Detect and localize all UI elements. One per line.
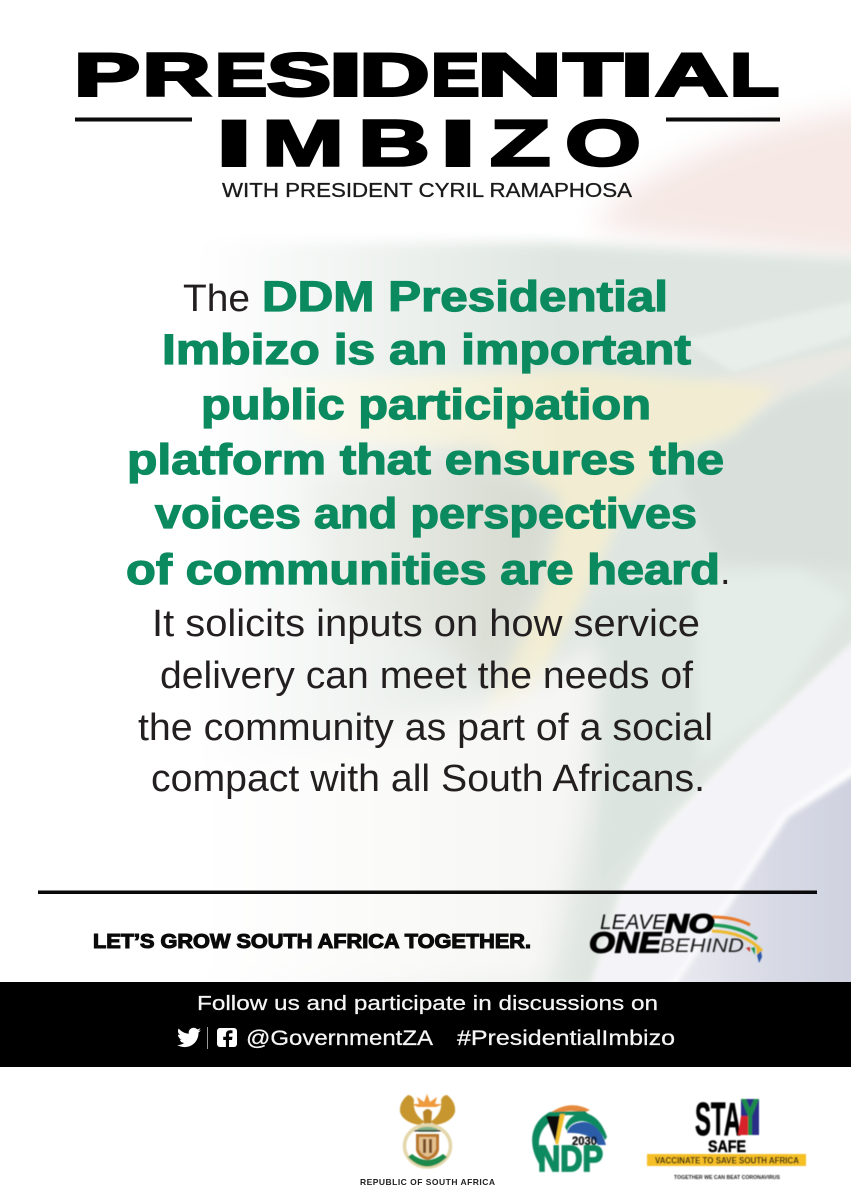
word STA: STA <box>695 1093 741 1145</box>
heading: PRESIDENTIAL: I <box>328 42 362 108</box>
banner text: VACCINATE TO SAVE SOUTH AFRICA <box>655 1156 799 1166</box>
heading: PRESIDENTIAL: P <box>74 42 140 108</box>
heading rule right <box>666 118 780 122</box>
background: faded South African flag <box>270 104 851 982</box>
green highlighted statement: of communities are heard <box>126 546 720 594</box>
icon: twitter <box>177 1028 201 1047</box>
icon divider <box>207 1027 208 1049</box>
green highlighted statement: Imbizo is an important <box>162 326 691 374</box>
logo: Leave No One Behind: ONE <box>589 928 663 960</box>
slogan: LET’S GROW SOUTH AFRICA TOGETHER. <box>93 931 531 953</box>
heading: PRESIDENTIAL: R <box>142 42 210 108</box>
green highlighted statement: . <box>720 551 731 593</box>
main message text <box>126 273 731 800</box>
supporting statement: the community as part of a social <box>138 707 713 749</box>
logo: Leave No One Behind <box>589 908 762 963</box>
green band <box>565 1113 607 1140</box>
twitter and facebook handle: @GovernmentZA <box>246 1027 433 1050</box>
supporting statement <box>138 603 713 800</box>
flag colour ticks <box>746 947 750 952</box>
heading: PRESIDENTIAL: E <box>215 42 267 108</box>
logo: Leave No One Behind: NO <box>665 908 714 938</box>
rainbow swoosh <box>712 917 762 951</box>
heading: PRESIDENTIAL: S <box>267 42 331 108</box>
blue band <box>567 1122 606 1145</box>
heading: IMBIZO <box>216 107 641 180</box>
subtitle: WITH PRESIDENT CYRIL RAMAPHOSA <box>222 180 633 202</box>
supporting statement: delivery can meet the needs of <box>160 655 693 697</box>
heading: PRESIDENTIAL: A <box>656 42 728 108</box>
green highlighted statement: platform that ensures the <box>127 436 724 484</box>
green highlighted statement: voices and perspectives <box>155 490 697 538</box>
heading rule left <box>75 118 192 122</box>
shield <box>416 1134 439 1160</box>
title: Presidential Imbizo <box>74 42 780 202</box>
heading: IMBIZO: I <box>216 107 252 180</box>
green highlighted statement: public participation <box>201 381 651 429</box>
green ring <box>532 1111 590 1165</box>
supporting statement: It solicits inputs on how service <box>152 603 700 645</box>
heading: IMBIZO: I <box>440 107 476 180</box>
wheat wreath <box>404 1125 450 1167</box>
logo: NDP 2030 <box>532 1105 607 1179</box>
secretary bird wings <box>400 1095 425 1125</box>
heading: IMBIZO: Z <box>490 107 550 180</box>
green highlighted statement <box>126 273 731 594</box>
motto ribbon <box>408 1154 447 1166</box>
word SAFE: SAFE <box>708 1137 746 1156</box>
green protea <box>415 1124 440 1132</box>
heading: PRESIDENTIAL: N <box>477 42 562 108</box>
hashtag: #PresidentialImbizo <box>457 1027 675 1050</box>
heading: PRESIDENTIAL <box>74 42 779 108</box>
logo: Stay Safe <box>647 1093 806 1181</box>
green highlighted statement: The <box>183 278 250 320</box>
yellow banner <box>647 1154 806 1166</box>
heading: PRESIDENTIAL: D <box>360 42 430 108</box>
green highlighted statement: DDM Presidential <box>262 273 668 321</box>
call to action: Follow us and participate in discussions on <box>197 993 658 1015</box>
heading: PRESIDENTIAL: I <box>620 42 654 108</box>
supporting statement: compact with all South Africans. <box>151 758 705 800</box>
NDP letters: NDP <box>538 1138 603 1179</box>
logo: Leave No One Behind: LEAVE <box>600 911 667 934</box>
orange arc <box>546 1105 590 1118</box>
logo: coat of arms of South Africa <box>400 1094 455 1167</box>
label: Republic of South Africa: REPUBLIC OF SOUTH AFRICA <box>360 1177 495 1187</box>
heading: IMBIZO: O <box>565 107 641 180</box>
sun rays <box>411 1094 443 1107</box>
flag-coloured letter Y <box>738 1099 759 1135</box>
strapline: TOGETHER WE CAN BEAT CORONAVIRUS <box>674 1175 780 1181</box>
heading: PRESIDENTIAL: T <box>564 42 622 108</box>
heading: IMBIZO: B <box>358 107 430 180</box>
heading: IMBIZO: M <box>262 107 344 180</box>
heading: PRESIDENTIAL: E <box>431 42 480 108</box>
heading: PRESIDENTIAL: L <box>730 42 779 108</box>
logo: Leave No One Behind: BEHIND <box>660 936 744 957</box>
social media bar <box>0 982 851 1067</box>
black and gold triangle <box>546 1116 560 1143</box>
year 2030: 2030 <box>572 1136 597 1148</box>
footer divider <box>38 890 817 894</box>
white logo strip <box>0 1067 851 1200</box>
icon: facebook <box>217 1028 237 1047</box>
